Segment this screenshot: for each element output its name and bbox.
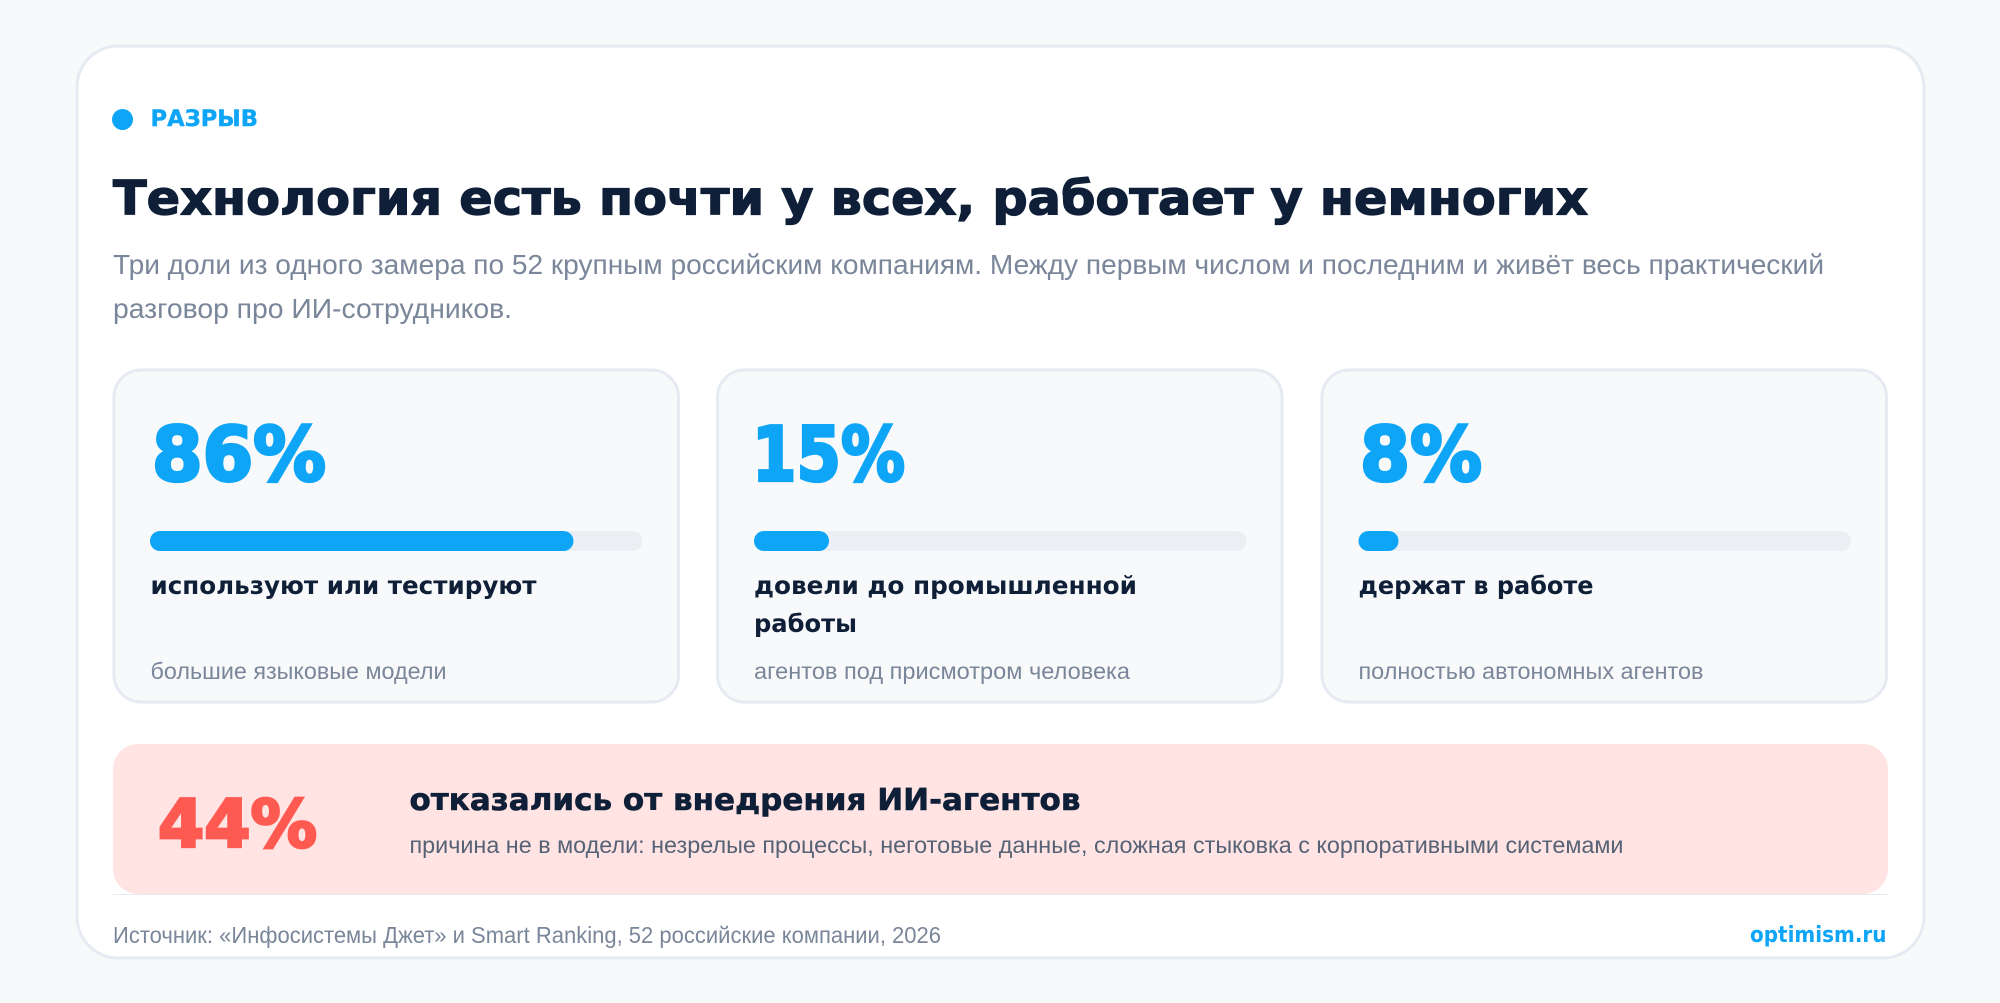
eyebrow label: РАЗРЫВ (150, 107, 258, 132)
alert text: причина не в модели: незрелые процессы, неготовые данные, сложная стыковка с корпоративными системами (410, 832, 1624, 858)
stat label: используют или тестируют (150, 571, 537, 600)
stat label (754, 571, 1137, 638)
progress bar 86% (150, 531, 642, 551)
stat note: большие языковые модели (150, 658, 446, 684)
stat label: держат в работе (1358, 571, 1594, 600)
progress bar 8% (1358, 531, 1851, 551)
subtitle (113, 249, 1824, 324)
title: Технология есть почти у всех, работает у немногих (113, 172, 1588, 226)
stat label: довели до промышленной (754, 571, 1137, 600)
stat number 86%: 86% (152, 410, 326, 498)
subtitle: Три доли из одного замера по 52 крупным российским компаниям. Между первым числом и последним и живёт весь практический (113, 249, 1824, 280)
stat label: работы (754, 609, 857, 638)
footer (113, 894, 1888, 948)
panel: alert 44% (113, 744, 1888, 894)
panel: stat card 15% (718, 370, 1282, 702)
stat number 15%: 15% (752, 410, 905, 498)
source: Источник: «Инфосистемы Джет» и Smart Ranking, 52 российские компании, 2026 (113, 922, 941, 948)
subtitle: разговор про ИИ-сотрудников. (113, 293, 512, 324)
stat note: агентов под присмотром человека (754, 658, 1130, 684)
alert number: 44% (158, 787, 317, 863)
panel: stat card 8% (1322, 370, 1886, 702)
stat note: полностью автономных агентов (1358, 658, 1704, 684)
progress bar 15% (754, 531, 1246, 551)
brand: optimism.ru (1750, 923, 1886, 948)
alert heading: отказались от внедрения ИИ-агентов (410, 783, 1080, 818)
panel: stat card 86% (114, 370, 678, 702)
stat number 8%: 8% (1360, 410, 1482, 498)
